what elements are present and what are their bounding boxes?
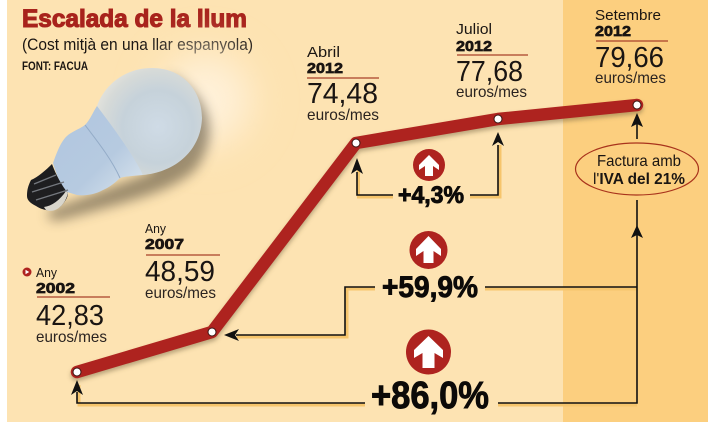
label: Juliol 2012: Juliol bbox=[456, 21, 492, 38]
highlighted band: Setembre 2012 bbox=[563, 0, 708, 422]
icon: up arrow medium bbox=[410, 231, 448, 269]
icon: up arrow small bbox=[413, 149, 445, 181]
percent: +86,0%: +86,0% bbox=[371, 375, 489, 417]
label: Abril 2012: 2012 bbox=[307, 60, 343, 77]
label: 2002 bbox=[22, 266, 110, 346]
label: 2007: Any bbox=[145, 222, 167, 236]
label: 2002: 2002 bbox=[36, 280, 75, 297]
label: Setembre 2012 bbox=[595, 7, 668, 87]
percent: +59,9%: +59,9% bbox=[382, 271, 478, 304]
subtitle: (Cost mitjà en una llar espanyola) bbox=[22, 36, 253, 54]
label: 2002: Any bbox=[36, 266, 58, 280]
callout: Factura amb IVA del 21%: Factura amb bbox=[597, 153, 681, 170]
label: Setembre 2012: 79,66 bbox=[595, 42, 664, 74]
label: Juliol 2012: 2012 bbox=[456, 38, 492, 55]
label: Juliol 2012 bbox=[456, 21, 528, 101]
title: Escalada de la llum bbox=[22, 5, 247, 33]
data point: 2002 bbox=[73, 368, 81, 376]
label: Abril 2012: 74,48 bbox=[307, 78, 378, 110]
price line chart bbox=[73, 101, 641, 376]
label: Abril 2012: Abril bbox=[307, 44, 340, 61]
label: 2007 bbox=[145, 222, 220, 302]
label: Juliol 2012: 77,68 bbox=[456, 56, 523, 88]
data point: Setembre 2012 bbox=[633, 101, 641, 109]
label: 2002: euros/mes bbox=[36, 329, 107, 346]
label: Setembre 2012: 2012 bbox=[595, 23, 631, 40]
label: Abril 2012: euros/mes bbox=[307, 107, 379, 124]
arrow: to Setembre point bbox=[631, 113, 643, 139]
icon: bullet bbox=[22, 268, 32, 276]
callout: Factura amb IVA del 21%: l'IVA del 21% bbox=[593, 171, 685, 188]
data point: Abril 2012 bbox=[352, 139, 360, 147]
label: 2007: 48,59 bbox=[145, 256, 215, 288]
label: Setembre 2012: euros/mes bbox=[595, 70, 666, 87]
label: Juliol 2012: euros/mes bbox=[456, 84, 527, 101]
label: 2007: 2007 bbox=[145, 236, 184, 253]
icon: up arrow large bbox=[406, 330, 451, 374]
bracket: +59,9% bbox=[224, 287, 637, 341]
bracket: +86,0% bbox=[71, 200, 643, 405]
source: FONT: FACUA bbox=[22, 61, 88, 73]
percent: +4,3%: +4,3% bbox=[398, 182, 464, 209]
icon: light bulb photo bbox=[27, 30, 275, 220]
label: Abril 2012 bbox=[307, 44, 379, 124]
label: Setembre 2012: Setembre bbox=[595, 7, 661, 24]
callout: Factura amb IVA del 21% bbox=[576, 143, 698, 195]
data point: 2007 bbox=[208, 328, 216, 336]
bracket: +4,3% bbox=[351, 132, 504, 197]
data point: Juliol 2012 bbox=[494, 115, 502, 123]
label: 2002: 42,83 bbox=[36, 300, 104, 332]
label: 2007: euros/mes bbox=[145, 285, 216, 302]
